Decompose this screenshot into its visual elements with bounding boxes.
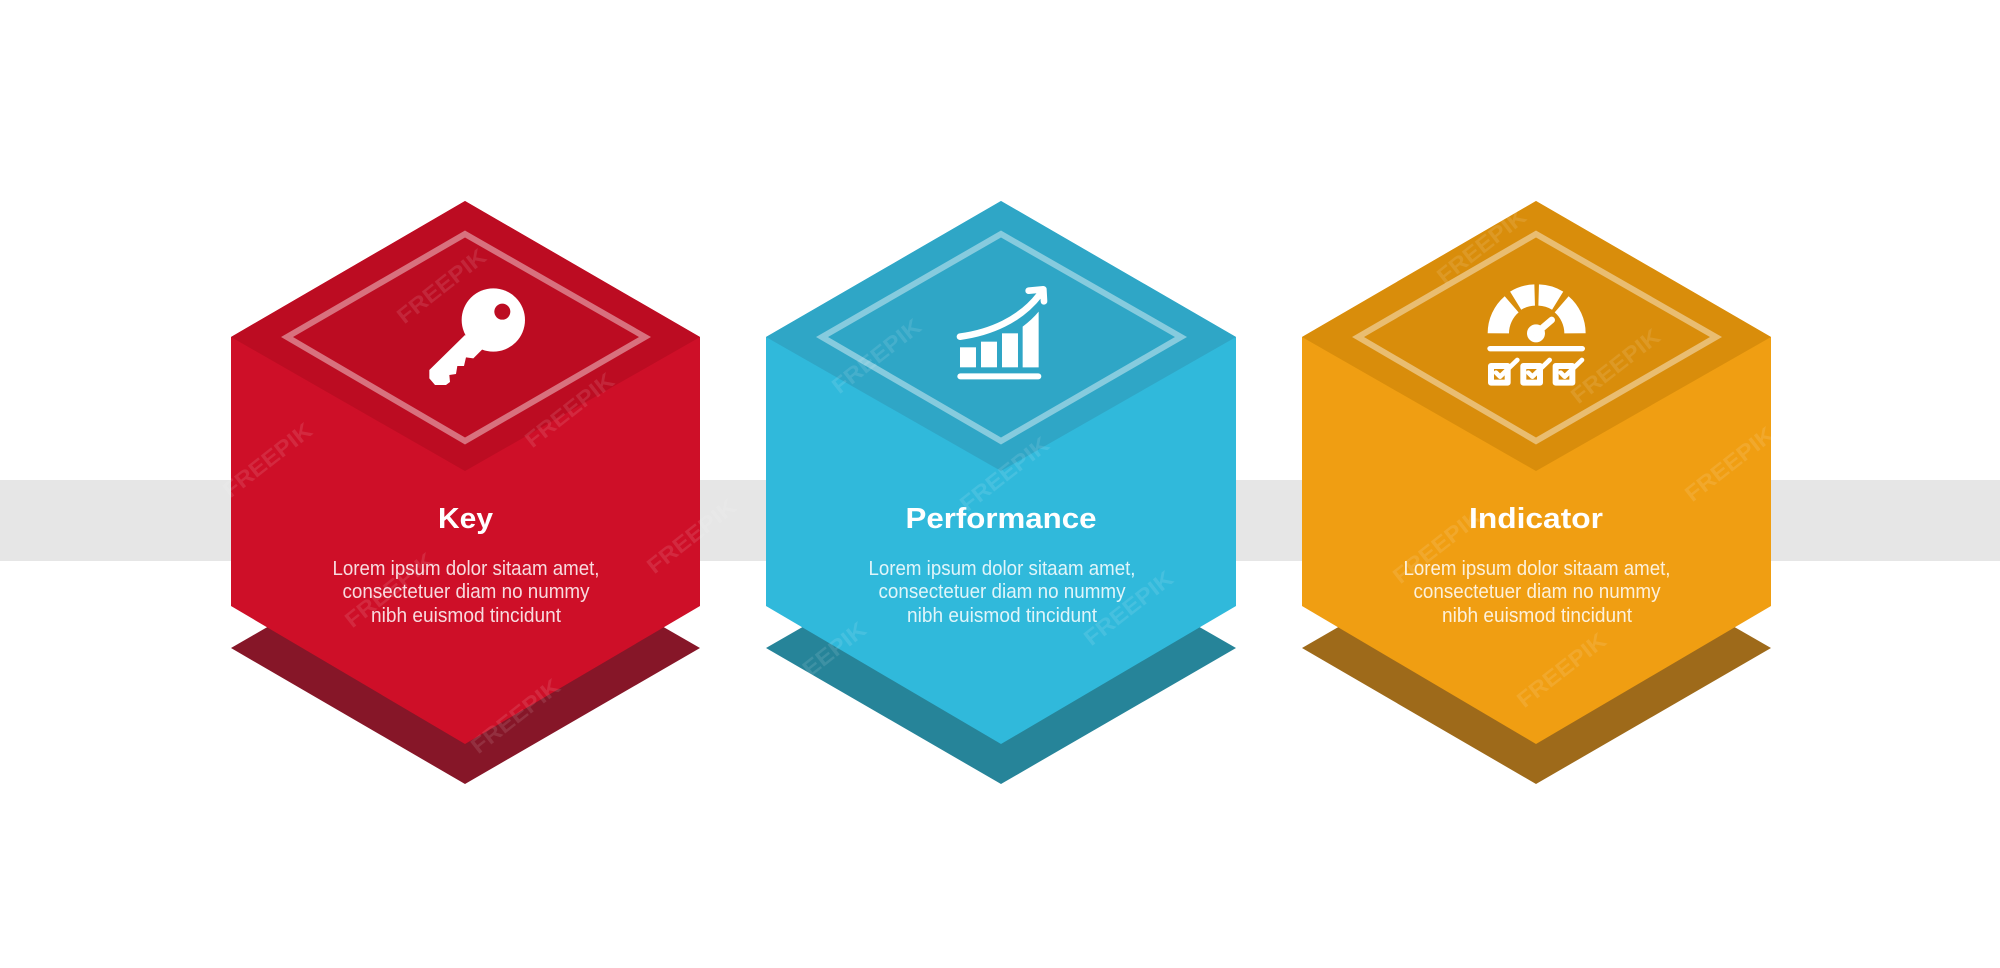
inner diamond outline: Indicator — [1358, 234, 1716, 441]
shadow diamond: Key — [231, 513, 700, 784]
watermarks: FREEPIK — [955, 432, 1054, 517]
watermarks: FREEPIK — [1566, 324, 1665, 409]
icon: growth chart — [957, 289, 1044, 379]
watermarks: FREEPIK — [772, 617, 871, 702]
watermarks: FREEPIK — [1388, 504, 1487, 589]
watermarks: FREEPIK — [520, 368, 619, 453]
top face: Performance — [766, 201, 1236, 471]
hexagon body: Indicator — [1302, 201, 1771, 744]
text block: Indicator: Lorem ipsum dolor sitaam amet, — [1404, 558, 1670, 580]
heading: Key: Key — [438, 503, 493, 535]
heading: Performance: Performance — [906, 503, 1096, 535]
heading: Indicator: Indicator — [1469, 503, 1603, 535]
watermarks: FREEPIK — [218, 418, 317, 503]
watermarks: FREEPIK — [1512, 628, 1611, 713]
icon: key — [429, 288, 525, 385]
top face: Indicator — [1302, 201, 1771, 471]
background band — [0, 480, 2000, 561]
text block: Key: nibh euismod tincidunt — [371, 605, 561, 627]
hexagon body: Key — [231, 201, 700, 744]
panel: Indicator — [1302, 201, 1771, 784]
inner diamond outline: Performance — [822, 234, 1181, 441]
hexagon body: Performance — [766, 201, 1236, 744]
text block: Performance: nibh euismod tincidunt — [907, 605, 1097, 627]
text block: Key: Lorem ipsum dolor sitaam amet, — [332, 558, 600, 580]
text block: Indicator: nibh euismod tincidunt — [1442, 605, 1632, 627]
text block: Indicator — [1404, 558, 1670, 627]
text block: Indicator: consectetuer diam no nummy — [1414, 581, 1660, 603]
watermarks — [218, 204, 1779, 759]
inner diamond outline: Key — [287, 234, 645, 441]
text block: Performance: consectetuer diam no nummy — [878, 581, 1126, 603]
watermarks: FREEPIK — [466, 674, 565, 759]
shadow diamond: Performance — [766, 513, 1236, 784]
watermarks: FREEPIK — [1079, 566, 1178, 651]
watermarks: FREEPIK — [340, 548, 439, 633]
text block: Key — [332, 558, 600, 627]
text block: Performance: Lorem ipsum dolor sitaam amet, — [868, 558, 1136, 580]
icon: gauge with checkboxes — [1487, 295, 1585, 383]
text block: Performance — [868, 558, 1136, 627]
text block: Key: consectetuer diam no nummy — [342, 581, 590, 603]
panel: Performance — [766, 201, 1236, 784]
watermarks: FREEPIK — [642, 494, 741, 579]
panel: Key — [231, 201, 700, 784]
shadow diamond: Indicator — [1302, 513, 1771, 784]
watermarks: FREEPIK — [392, 244, 491, 329]
top face: Key — [231, 201, 700, 471]
watermarks: FREEPIK — [1432, 204, 1531, 289]
watermarks: FREEPIK — [1680, 422, 1779, 507]
watermarks: FREEPIK — [827, 314, 926, 399]
